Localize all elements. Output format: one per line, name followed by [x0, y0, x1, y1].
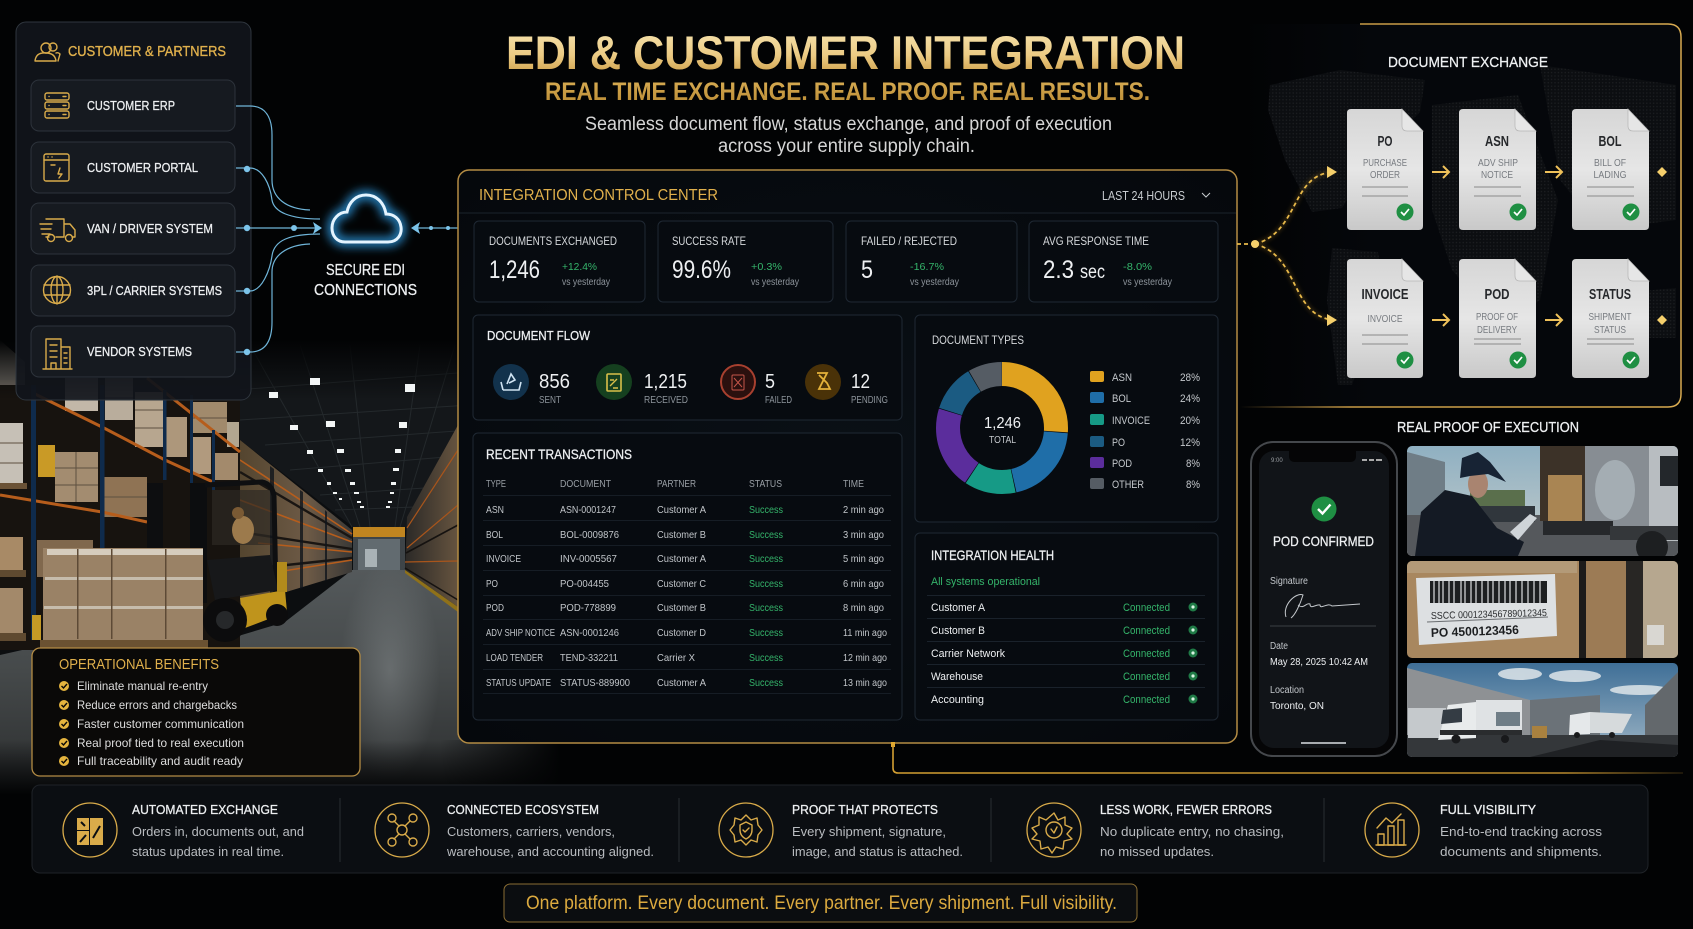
table header: STATUS	[749, 478, 782, 490]
item: automated exchange: AUTOMATED EXCHANGE	[132, 802, 278, 817]
panel: document types: DOCUMENT TYPES	[932, 333, 1024, 347]
item: connected ecosystem: CONNECTED ECOSYSTEM	[447, 802, 599, 817]
kpi: avg response time: sec	[1080, 262, 1105, 283]
legend: INVOICE	[1112, 415, 1150, 427]
connector: control center to proof	[891, 742, 1683, 773]
document: BOL: BILL OF	[1594, 157, 1626, 169]
table rows: Success	[749, 627, 783, 639]
far left rack wall	[240, 440, 352, 606]
description: Seamless document flow, status exchange, and proof of execution	[585, 114, 1112, 135]
cloud label	[314, 262, 417, 299]
legend: ASN	[1112, 372, 1132, 384]
table rows: PO-004455	[560, 578, 609, 590]
stat: received: 1,215	[644, 371, 687, 393]
icon: people	[35, 43, 60, 61]
table rows: Success	[749, 677, 783, 689]
flow arrows	[1432, 166, 1562, 326]
table rows: ASN	[486, 504, 504, 516]
dotted connector	[1237, 166, 1667, 326]
panel: document flow: DOCUMENT FLOW	[487, 328, 591, 343]
document: ASN: NOTICE	[1481, 169, 1513, 181]
tagline	[504, 884, 1137, 922]
signature	[1285, 595, 1360, 618]
item: less work fewer errors: No duplicate entry, no chasing,	[1100, 824, 1284, 839]
photo: shipping label on pallet	[1407, 561, 1678, 658]
document: invoice	[1347, 259, 1423, 378]
document: BOL: BOL	[1598, 133, 1622, 150]
document: BOL	[1572, 109, 1649, 230]
kpi: failed rejected: -16.7%	[910, 261, 944, 273]
item: less work fewer errors: no missed updates.	[1100, 844, 1214, 859]
item: less work fewer errors	[1027, 802, 1284, 859]
table header: TYPE	[486, 478, 506, 490]
panel: customer and partners	[16, 22, 251, 400]
right rack wall	[405, 425, 458, 607]
kpi: documents exchanged: +12.4%	[562, 261, 597, 273]
panel: integration health: INTEGRATION HEALTH	[931, 548, 1054, 563]
row: 3pl carrier systems	[31, 265, 235, 316]
stat: sent: 856	[539, 371, 570, 393]
benefit list: Faster customer communication	[77, 717, 244, 731]
table rows: Customer D	[657, 627, 706, 639]
tagline: One platform. Every document. Every partner. Every shipment. Full visibility.	[526, 892, 1117, 914]
table rows: Success	[749, 529, 783, 541]
stat: failed: 5	[765, 371, 775, 393]
health rows: Connected	[1123, 602, 1170, 614]
subtitle: REAL TIME EXCHANGE. REAL PROOF. REAL RESULTS.	[545, 78, 1150, 106]
table rows: Success	[749, 652, 783, 664]
table rows: Customer A	[657, 553, 706, 565]
item: proof that protects: PROOF THAT PROTECTS	[792, 802, 938, 817]
legend: POD	[1112, 458, 1132, 470]
stat: pending: PENDING	[851, 394, 888, 406]
document: ASN: ASN	[1485, 133, 1509, 150]
document: invoice: INVOICE	[1362, 286, 1408, 303]
panel: customer and partners: CUSTOMER & PARTNERS	[68, 44, 226, 60]
table rows: ASN-0001246	[560, 627, 619, 639]
legend: BOL	[1112, 393, 1131, 405]
benefit list: Real proof tied to real execution	[77, 736, 244, 750]
item: less work fewer errors: LESS WORK, FEWER ERRORS	[1100, 802, 1272, 817]
health rows: Warehouse	[931, 671, 983, 683]
item: connected ecosystem: warehouse, and accounting aligned.	[446, 844, 654, 859]
table rows	[486, 504, 887, 689]
benefit list	[59, 679, 244, 768]
phone: Location	[1270, 685, 1304, 696]
time range selector: LAST 24 HOURS	[1102, 189, 1185, 203]
table rows: Success	[749, 602, 783, 614]
health rows: Connected	[1123, 625, 1170, 637]
item: connected ecosystem	[375, 802, 654, 859]
panel: operational benefits	[32, 648, 360, 776]
cloud label: CONNECTIONS	[314, 282, 417, 299]
row: customer portal: CUSTOMER PORTAL	[87, 160, 198, 175]
stat: sent: SENT	[539, 394, 561, 406]
pallet of boxes	[40, 548, 208, 648]
document: invoice: INVOICE	[1368, 313, 1402, 325]
panel: integration health: All systems operational	[931, 576, 1040, 588]
item: proof that protects	[719, 802, 963, 859]
kpi: failed rejected: 5	[861, 256, 873, 284]
warehouse photo	[0, 340, 560, 795]
legend: PO	[1112, 437, 1125, 449]
kpi: avg response time: -8.0%	[1123, 261, 1152, 273]
table header: DOCUMENT	[560, 478, 611, 490]
table rows: Carrier X	[657, 652, 695, 664]
document: ASN: ADV SHIP	[1478, 157, 1518, 169]
stat: sent	[493, 364, 570, 406]
panel: operational benefits: OPERATIONAL BENEFITS	[59, 657, 219, 673]
table rows: ADV SHIP NOTICE	[486, 627, 555, 639]
icon: cloud	[332, 195, 401, 242]
health rows: Accounting	[931, 694, 984, 706]
stat: failed	[721, 365, 792, 406]
document: POD: PROOF OF	[1476, 311, 1518, 323]
heading: real proof of execution: REAL PROOF OF EXECUTION	[1397, 420, 1579, 436]
kpi: avg response time: vs yesterday	[1123, 277, 1172, 288]
row: customer portal	[31, 142, 235, 193]
description: across your entire supply chain.	[718, 136, 975, 157]
document: PO	[1347, 109, 1423, 230]
panel: integration control center	[458, 170, 1237, 743]
item: full visibility: documents and shipments.	[1440, 844, 1602, 859]
phone: Toronto, ON	[1270, 701, 1324, 712]
kpi: documents exchanged: vs yesterday	[562, 277, 610, 288]
row: van driver system	[31, 203, 235, 254]
item: full visibility	[1365, 802, 1603, 859]
document: status: STATUS	[1594, 324, 1626, 336]
table rows: Success	[749, 553, 783, 565]
kpi: success rate: +0.3%	[751, 261, 782, 273]
table rows: PO	[486, 578, 498, 590]
benefit list: Eliminate manual re-entry	[77, 679, 208, 693]
document: PO: PO	[1378, 133, 1393, 150]
document: BOL: LADING	[1594, 169, 1626, 181]
donut chart	[948, 374, 1056, 482]
item: full visibility: FULL VISIBILITY	[1440, 802, 1536, 817]
row: customer erp	[31, 80, 235, 131]
legend	[1090, 371, 1200, 491]
phone	[1251, 442, 1397, 756]
row: 3pl carrier systems: 3PL / CARRIER SYSTEMS	[87, 283, 222, 298]
table rows: INV-0005567	[560, 553, 617, 565]
photo: shipping label on pallet: PO 4500123456	[1431, 623, 1519, 640]
table rows: 11 min ago	[843, 627, 887, 639]
legend: 8%	[1186, 458, 1200, 470]
health rows: Connected	[1123, 671, 1170, 683]
health rows: Connected	[1123, 694, 1170, 706]
kpi: success rate: vs yesterday	[751, 277, 799, 288]
item: proof that protects: image, and status is attached.	[792, 844, 963, 859]
near left racks	[0, 380, 240, 650]
table rows: 2 min ago	[843, 504, 884, 516]
phone: May 28, 2025 10:42 AM	[1270, 657, 1368, 668]
table rows: Customer A	[657, 504, 706, 516]
legend: 8%	[1186, 479, 1200, 491]
table rows: Success	[749, 578, 783, 590]
item: full visibility: End-to-end tracking across	[1440, 824, 1603, 839]
phone: Date	[1270, 641, 1288, 652]
legend: 12%	[1180, 437, 1200, 449]
table rows: Customer A	[657, 677, 706, 689]
health rows: Carrier Network	[931, 648, 1005, 660]
health rows: Customer B	[931, 625, 985, 637]
health rows: Connected	[1123, 648, 1170, 660]
document: PO: PURCHASE	[1363, 157, 1407, 169]
table rows: TEND-332211	[560, 652, 618, 664]
stat: failed: FAILED	[765, 394, 792, 406]
table rows: 8 min ago	[843, 602, 884, 614]
kpi: avg response time: AVG RESPONSE TIME	[1043, 234, 1149, 248]
document: status	[1572, 259, 1649, 378]
table rows: STATUS-889900	[560, 677, 630, 689]
photo: trucks at warehouse	[1407, 663, 1678, 757]
table rows: Customer B	[657, 602, 706, 614]
kpi: failed rejected	[846, 221, 1017, 302]
legend: 20%	[1180, 415, 1200, 427]
row: vendor systems: VENDOR SYSTEMS	[87, 344, 192, 359]
table rows: 6 min ago	[843, 578, 884, 590]
table rows: BOL-0009876	[560, 529, 619, 541]
document: POD	[1459, 259, 1536, 378]
table rows: INVOICE	[486, 553, 521, 565]
panel: document exchange	[1237, 24, 1681, 407]
row: vendor systems	[31, 326, 235, 377]
stat: received	[596, 364, 688, 406]
panel: document types	[915, 315, 1218, 522]
benefit list: Full traceability and audit ready	[77, 754, 243, 768]
stat: pending	[805, 364, 888, 406]
icon: confirmed check	[1312, 496, 1336, 522]
description	[585, 114, 1112, 157]
stat: pending: 12	[851, 371, 870, 393]
donut chart: TOTAL	[989, 434, 1016, 446]
table header	[486, 478, 864, 490]
table header: PARTNER	[657, 478, 696, 490]
table rows: LOAD TENDER	[486, 652, 543, 664]
table rows: Customer C	[657, 578, 706, 590]
table rows: 13 min ago	[843, 677, 887, 689]
kpi: failed rejected: FAILED / REJECTED	[861, 234, 957, 248]
kpi: documents exchanged: 1,246	[489, 256, 540, 284]
kpi: failed rejected: vs yesterday	[910, 277, 959, 288]
benefit list: Reduce errors and chargebacks	[77, 698, 237, 712]
table rows: STATUS UPDATE	[486, 677, 551, 689]
row: customer erp: CUSTOMER ERP	[87, 98, 175, 113]
connectors to cloud	[236, 106, 458, 355]
table rows: Customer B	[657, 529, 706, 541]
legend: 28%	[1180, 372, 1200, 384]
kpi: avg response time: 2.3	[1043, 256, 1074, 284]
stat: received: RECEIVED	[644, 394, 688, 406]
panel: recent transactions	[473, 433, 902, 720]
kpi: documents exchanged: DOCUMENTS EXCHANGED	[489, 234, 617, 248]
kpi: success rate: SUCCESS RATE	[672, 234, 746, 248]
document: POD: DELIVERY	[1477, 324, 1517, 336]
table rows: POD	[486, 602, 504, 614]
panel: value strip	[32, 785, 1648, 873]
kpi: avg response time	[1029, 221, 1218, 302]
table rows: ASN-0001247	[560, 504, 616, 516]
panel: integration health	[915, 533, 1218, 720]
panel: document exchange: DOCUMENT EXCHANGE	[1388, 55, 1548, 71]
panel: document flow	[473, 315, 902, 420]
donut chart: 1,246	[984, 415, 1021, 432]
kpi: success rate: 99.6%	[672, 256, 731, 284]
phone: POD CONFIRMED	[1273, 534, 1374, 549]
phone: 9:00	[1271, 458, 1283, 464]
health rows	[931, 602, 1198, 706]
legend: 24%	[1180, 393, 1200, 405]
cloud label: SECURE EDI	[326, 262, 405, 279]
photo: shipping label on pallet: SSCC 000123456789012345	[1431, 608, 1547, 622]
item: automated exchange: Orders in, documents out, and	[132, 824, 304, 839]
title: EDI & CUSTOMER INTEGRATION	[506, 26, 1185, 79]
item: connected ecosystem: Customers, carriers, vendors,	[447, 824, 615, 839]
item: proof that protects: Every shipment, signature,	[792, 824, 946, 839]
table rows: 12 min ago	[843, 652, 887, 664]
document: POD: POD	[1484, 286, 1510, 303]
panel: recent transactions: RECENT TRANSACTIONS	[486, 447, 632, 462]
table rows: 5 min ago	[843, 553, 884, 565]
table rows: 3 min ago	[843, 529, 884, 541]
photo: driver with tablet and truck	[1407, 446, 1678, 563]
world map	[1268, 65, 1676, 385]
table rows: Success	[749, 504, 783, 516]
phone: Signature	[1270, 576, 1308, 587]
forklift	[147, 482, 288, 642]
kpi: success rate	[658, 221, 833, 302]
kpi: documents exchanged	[474, 221, 645, 302]
document: status: STATUS	[1589, 286, 1631, 303]
item: automated exchange: status updates in real time.	[132, 844, 284, 859]
barcode	[1430, 581, 1547, 603]
panel: integration control center: INTEGRATION CONTROL CENTER	[479, 187, 718, 204]
document: status: SHIPMENT	[1588, 311, 1632, 323]
row: van driver system: VAN / DRIVER SYSTEM	[87, 221, 213, 236]
health rows: Customer A	[931, 602, 986, 614]
table rows: POD-778899	[560, 602, 616, 614]
table header: TIME	[843, 478, 864, 490]
table rows: BOL	[486, 529, 503, 541]
document: PO: ORDER	[1370, 169, 1400, 181]
document: ASN	[1459, 109, 1536, 230]
item: automated exchange	[63, 802, 304, 859]
ceiling lights	[269, 378, 415, 508]
legend: OTHER	[1112, 479, 1144, 491]
